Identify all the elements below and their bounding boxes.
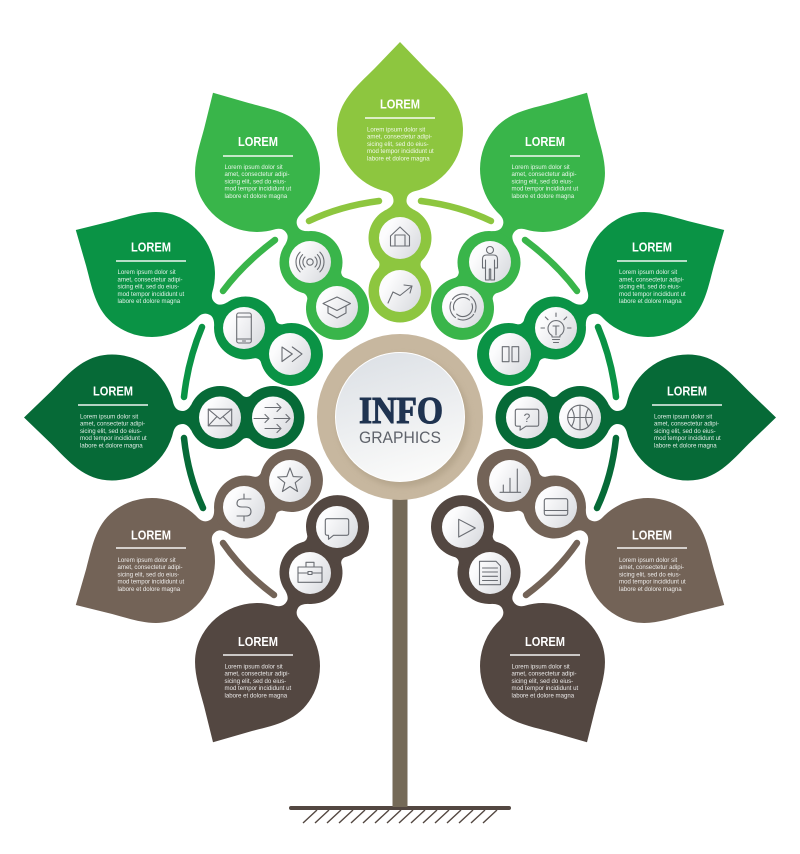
body text: Lorem ipsum dolor sit	[367, 126, 426, 134]
ground line with hatching	[289, 806, 511, 823]
body text: amet, consectetur adipi-	[118, 564, 183, 571]
panel: middle right leaf	[496, 354, 776, 480]
body text: Lorem ipsum dolor sit	[118, 557, 176, 564]
body text	[654, 414, 721, 450]
panel: upper right leaf	[450, 175, 756, 425]
body text: Lorem ipsum dolor sit	[80, 414, 139, 420]
icon: briefcase	[298, 562, 322, 582]
body text	[512, 664, 579, 700]
icon: play	[459, 519, 475, 537]
icon: dollar	[237, 494, 251, 521]
body text: amet, consectetur adipi-	[512, 171, 577, 178]
ring faces	[289, 506, 358, 594]
body text: mod tempor incididunt ut	[224, 186, 292, 193]
body text	[224, 664, 292, 700]
ring faces	[489, 460, 577, 528]
icon: arrows	[254, 404, 290, 432]
panel: upper left leaf	[44, 175, 350, 425]
body text: amet, consectetur adipi-	[224, 671, 290, 678]
tree trunk	[392, 495, 408, 807]
body text	[80, 414, 147, 450]
body text: Lorem ipsum dolor sit	[654, 414, 713, 420]
body text: labore et dolore magna	[512, 692, 575, 700]
icon: signal	[296, 252, 324, 272]
body text: mod tempor incididunt ut	[619, 578, 686, 586]
body text	[118, 557, 185, 593]
icon: document	[480, 561, 500, 585]
panel: bottom right leaf	[392, 468, 642, 774]
icon: light bulb	[541, 313, 571, 342]
icon: house	[390, 227, 410, 246]
subtitle: GRAPHICS: GRAPHICS	[359, 429, 441, 447]
body text: amet, consectetur adipi-	[619, 276, 684, 283]
body text: Lorem ipsum dolor sit	[619, 557, 678, 564]
body text: labore et dolore magna	[118, 586, 181, 593]
body text: labore et dolore magna	[367, 156, 430, 162]
body text: mod tempor incididunt ut	[512, 685, 579, 692]
body text: mod tempor incididunt ut	[619, 291, 686, 298]
heading: LOREM	[93, 384, 133, 398]
leaf shape with two rings	[392, 468, 642, 774]
body text: sicing elit, sed do eius-	[367, 141, 429, 148]
heading: LOREM	[238, 635, 278, 649]
icon: growth chart	[388, 285, 412, 303]
body text: labore et dolore magna	[224, 692, 288, 700]
icon: star	[278, 468, 302, 492]
body text	[118, 269, 185, 305]
body text: sicing elit, sed do eius-	[224, 178, 286, 186]
body text: sicing elit, sed do eius-	[80, 428, 142, 435]
ring faces	[199, 396, 294, 438]
body text: Lorem ipsum dolor sit	[512, 664, 570, 670]
heading: LOREM	[238, 135, 278, 149]
leaf shape with two rings	[450, 175, 756, 425]
body text: amet, consectetur adipi-	[619, 564, 684, 571]
panel: top leaf	[337, 42, 463, 322]
heading: LOREM	[632, 240, 672, 254]
leaf shape with two rings	[450, 410, 756, 660]
body text: labore et dolore magna	[224, 193, 288, 200]
body text: sicing elit, sed do eius-	[512, 178, 573, 186]
icon: envelope	[208, 409, 232, 426]
center badge	[317, 334, 483, 500]
icon: question bubble	[515, 409, 539, 430]
body text: sicing elit, sed do eius-	[512, 678, 573, 685]
body text: mod tempor incididunt ut	[512, 186, 579, 193]
panel: top left leaf	[158, 61, 408, 367]
heading: LOREM	[131, 528, 171, 542]
heading: LOREM	[667, 384, 707, 398]
body text: amet, consectetur adipi-	[80, 421, 145, 428]
body text: sicing elit, sed do eius-	[224, 678, 286, 685]
body text: Lorem ipsum dolor sit	[619, 269, 678, 276]
body text: amet, consectetur adipi-	[654, 421, 719, 428]
ring faces	[223, 307, 311, 375]
body text: mod tempor incididunt ut	[224, 685, 292, 692]
body text	[224, 164, 292, 200]
leaf shape with two rings	[158, 61, 408, 367]
panel: lower right leaf	[450, 410, 756, 660]
body text: Lorem ipsum dolor sit	[224, 664, 283, 670]
body text: labore et dolore magna	[512, 193, 575, 200]
heading: LOREM	[632, 528, 672, 542]
leaf shape with two rings	[337, 42, 463, 322]
body text	[512, 164, 579, 200]
heading: LOREM	[525, 635, 565, 649]
leaf shape with two rings	[158, 468, 408, 774]
leaf shape with two rings	[44, 175, 350, 425]
ring faces	[289, 241, 358, 328]
panel: bottom left leaf	[158, 468, 408, 774]
body text: labore et dolore magna	[654, 442, 717, 450]
ring faces	[506, 396, 601, 438]
icon: speech bubble	[325, 519, 349, 539]
icon: phone	[237, 313, 251, 343]
body text: amet, consectetur adipi-	[224, 171, 290, 178]
heading: LOREM	[131, 240, 171, 254]
heading: LOREM	[380, 98, 420, 112]
body text: sicing elit, sed do eius-	[619, 571, 681, 578]
body text: mod tempor incididunt ut	[367, 148, 434, 155]
body text	[619, 557, 686, 593]
body text: labore et dolore magna	[118, 298, 181, 305]
leaf shape with two rings	[44, 410, 350, 660]
icon: segmented circle	[445, 289, 481, 325]
ring faces	[442, 506, 511, 594]
body text	[619, 269, 686, 305]
body text: Lorem ipsum dolor sit	[118, 269, 176, 276]
title: INFO: INFO	[359, 390, 443, 432]
icon: basketball	[568, 405, 592, 430]
ring faces	[489, 307, 577, 375]
body text: mod tempor incididunt ut	[118, 291, 185, 298]
icon: monitor	[544, 499, 568, 515]
body text: Lorem ipsum dolor sit	[512, 164, 570, 171]
body text: sicing elit, sed do eius-	[118, 571, 179, 578]
arcs between leaves	[184, 201, 616, 595]
panel: lower left leaf	[44, 410, 350, 660]
icon: bar chart	[500, 469, 521, 492]
body text	[367, 126, 434, 162]
body text: Lorem ipsum dolor sit	[224, 164, 283, 171]
body text: mod tempor incididunt ut	[654, 435, 721, 442]
ring faces	[442, 241, 511, 328]
body text: sicing elit, sed do eius-	[654, 428, 716, 435]
body text: labore et dolore magna	[80, 442, 143, 450]
body text: amet, consectetur adipi-	[512, 671, 577, 678]
body text: amet, consectetur adipi-	[367, 134, 432, 141]
body text: sicing elit, sed do eius-	[619, 284, 681, 291]
body text: mod tempor incididunt ut	[80, 435, 147, 442]
icon: fast forward	[282, 347, 302, 362]
body text: sicing elit, sed do eius-	[118, 284, 179, 291]
leaf shape with two rings	[24, 354, 304, 480]
leaf shape with two rings	[392, 61, 642, 367]
icon: graduation cap	[323, 297, 350, 318]
heading: LOREM	[525, 135, 565, 149]
body text: amet, consectetur adipi-	[118, 276, 183, 283]
ring faces	[223, 460, 311, 528]
icon: question bubble: ?	[524, 411, 531, 425]
body text: labore et dolore magna	[619, 586, 682, 593]
body text: labore et dolore magna	[619, 298, 682, 305]
ring faces	[379, 217, 421, 312]
body text: mod tempor incididunt ut	[118, 578, 185, 586]
panel: middle left leaf	[24, 354, 304, 480]
leaf shape with two rings	[496, 354, 776, 480]
icon: pause	[502, 347, 519, 362]
panel: top right leaf	[392, 61, 642, 367]
icon: person	[482, 246, 498, 280]
